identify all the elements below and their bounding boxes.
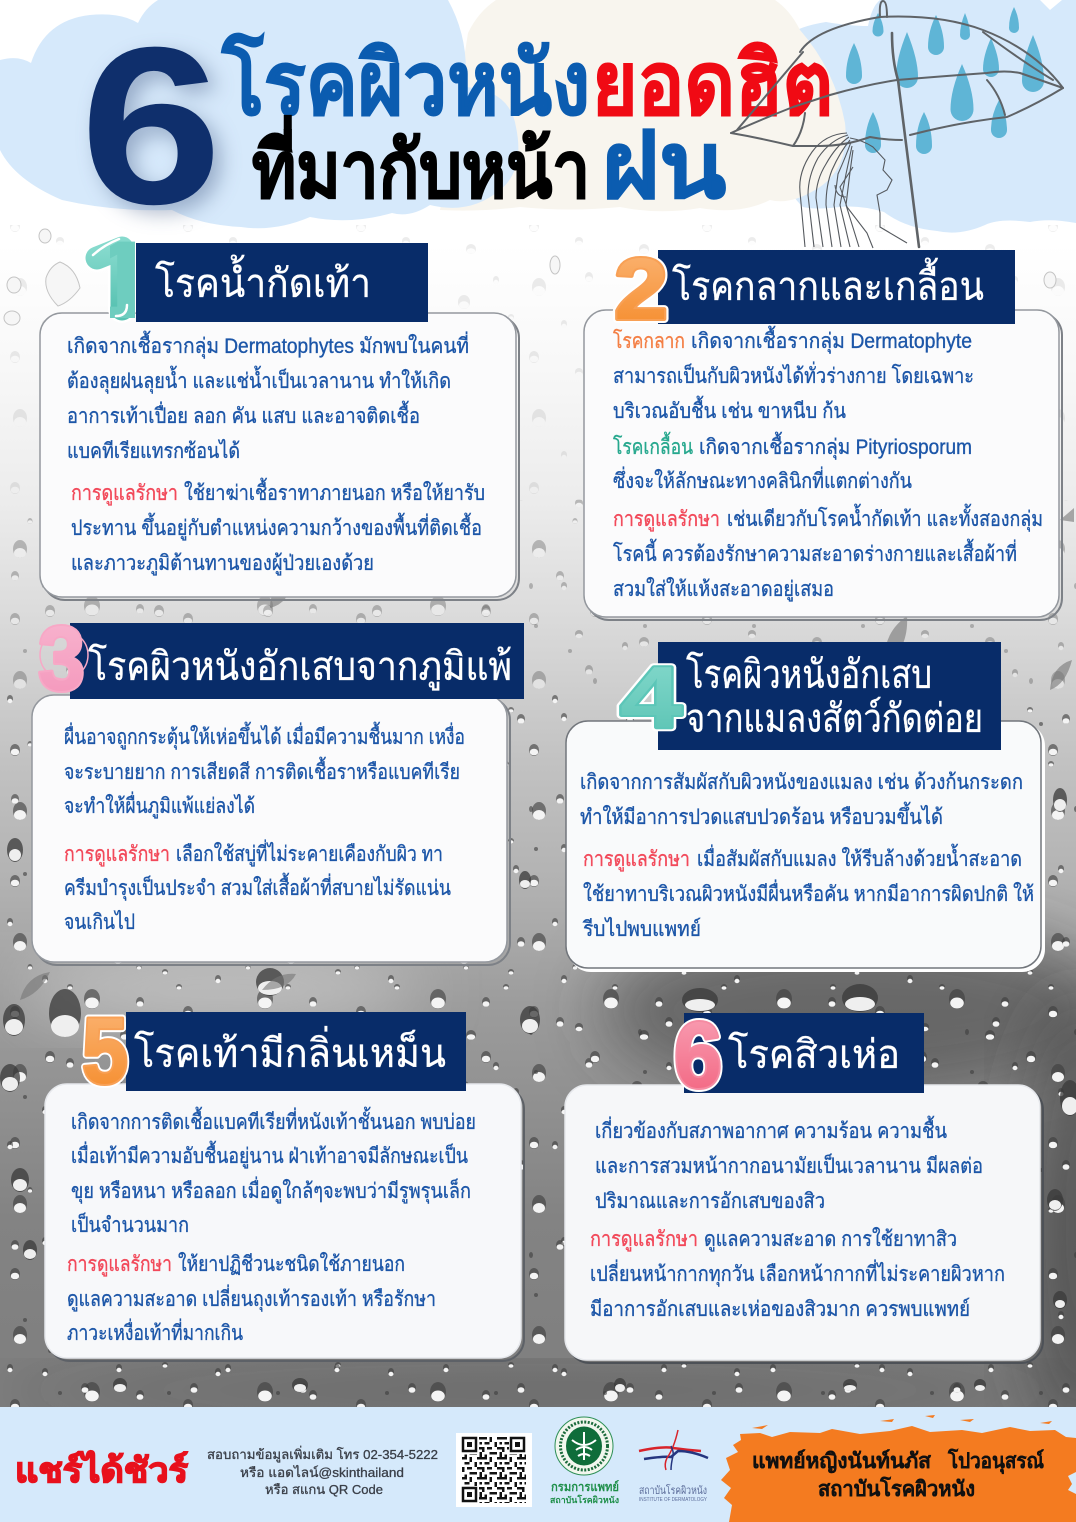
description — [580, 771, 1023, 829]
description: ผื่นอาจถูกกระตุ้นให้เห่อขึ้นได้ เมื่อมีความชื้นมาก เหงื่อ — [64, 722, 465, 750]
heading bar: โรคเท้ามีกลิ่นเหม็น — [134, 1026, 446, 1076]
heading bar: โรคผิวหนังอักเสบ — [686, 652, 932, 697]
heading bar: โรคกลากและเกลื้อน — [672, 257, 984, 309]
card frame — [566, 721, 1044, 971]
treatment — [64, 839, 451, 934]
treatment: เลือกใช้สบู่ที่ไม่ระคายเคืองกับผิว ทา — [176, 839, 443, 867]
treatment: ประทาน ขึ้นอยู่กับตำแหน่งความกว้างของพื้นที่ติดเชื้อ — [71, 513, 482, 541]
headline line 1: ยอดฮิต — [592, 34, 833, 133]
treatment: การดูแลรักษา — [71, 482, 178, 506]
author banner: สถาบันโรคผิวหนัง — [818, 1476, 975, 1501]
description: และการสวมหน้ากากอนามัยเป็นเวลานาน มีผลต่อ — [595, 1152, 983, 1178]
text: tinea versicolor: โรคเกลื้อน — [613, 432, 693, 459]
number 1: 1 — [87, 218, 159, 342]
number 6: 6 — [674, 1003, 722, 1107]
contact text: สอบถามข้อมูลเพิ่มเติม โทร 02-354-5222 — [207, 1446, 438, 1463]
number 4: 4 — [620, 649, 682, 746]
description: แบคทีเรียแทรกซ้อนได้ — [67, 439, 240, 463]
logo: Department of Medical Services: สถาบันโรคผิวหนัง — [550, 1494, 619, 1505]
headline line 1: โรคผิวหนัง — [221, 33, 590, 133]
text: tinea versicolor — [613, 432, 972, 493]
description: ปริมาณและการอักเสบของสิว — [595, 1190, 825, 1213]
treatment: จนเกินไป — [64, 910, 135, 934]
treatment: การดูแลรักษา — [583, 848, 690, 872]
treatment: โรคนี้ ควรต้องรักษาความสะอาดร่างกายและเสื้อผ้าที่ — [613, 539, 1017, 566]
panel 2: โรคกลากและเกลื้อน — [584, 241, 1062, 620]
treatment: การดูแลรักษา — [590, 1228, 698, 1252]
cloud beige — [440, 0, 846, 211]
number 6: 6 — [674, 1003, 722, 1107]
rain drops — [846, 7, 1044, 154]
panel 3: โรคผิวหนังอักเสบจากภูมิแพ้ — [32, 608, 524, 965]
treatment: รีบไปพบแพทย์ — [582, 917, 701, 941]
cloud left — [0, 0, 518, 228]
QR code — [456, 1433, 532, 1507]
card frame — [32, 695, 510, 965]
number 5: 5 — [82, 998, 128, 1103]
big number 6: 6 — [88, 9, 230, 259]
title — [80, 1, 833, 259]
description — [67, 331, 469, 463]
treatment: ครีมบำรุงเป็นประจำ สวมใส่เสื้อผ้าที่สบายไม่รัดแน่น — [64, 873, 451, 901]
author banner — [721, 1415, 1076, 1522]
logo: Institute of Dermatology — [639, 1430, 708, 1503]
heading bar — [684, 1013, 924, 1093]
author banner: แพทย์หญิงนันท์นภัส — [752, 1449, 931, 1474]
number 5: 5 — [82, 998, 128, 1103]
contact text: หรือ สแกน QR Code — [265, 1482, 383, 1497]
brand: share with confidence: แชร์ได้ชัวร์ — [15, 1450, 189, 1490]
treatment: เมื่อสัมผัสกับแมลง ให้รีบล้างด้วยน้ำสะอาด — [697, 844, 1022, 871]
description: เกิดจากการติดเชื้อแบคทีเรียที่หนังเท้าชั้นนอก พบบ่อย — [71, 1107, 476, 1134]
author banner: โปวอนุสรณ์ — [947, 1448, 1044, 1475]
heading bar: โรคสิวเห่อ — [728, 1032, 900, 1077]
text: ringworm — [613, 326, 974, 423]
description: ทำให้มีอาการปวดแสบปวดร้อน หรือบวมขึ้นได้ — [580, 802, 943, 829]
umbrella — [731, 1, 1063, 247]
treatment — [582, 844, 1034, 941]
headline line 2: ฝน — [602, 115, 726, 217]
text: ringworm: สามารถเป็นกับผิวหนังได้ทั่วร่างกาย โดยเฉพาะ — [613, 361, 974, 388]
contact text: หรือ แอดไลน์@skinthailand — [240, 1465, 404, 1480]
treatment: ดูแลความสะอาด การใช้ยาทาสิว — [704, 1227, 957, 1252]
treatment — [71, 478, 485, 576]
description — [71, 1107, 476, 1237]
heading bar — [70, 623, 524, 699]
headline line 2: ที่มากับหน้า — [252, 115, 590, 214]
card frame — [40, 313, 519, 600]
panel 4: โรคผิวหนังอักเสบจากแมลงสัตว์กัดต่อย — [566, 642, 1044, 971]
treatment: ดูแลความสะอาด เปลี่ยนถุงเท้ารองเท้า หรือรักษา — [67, 1284, 436, 1312]
card frame — [584, 310, 1062, 620]
treatment — [67, 1252, 436, 1345]
number 1 — [86, 236, 136, 320]
description: เมื่อเท้ามีความอับชื้นอยู่นาน ฝ่าเท้าอาจมีลักษณะเป็น — [71, 1141, 468, 1169]
description: เกี่ยวข้องกับสภาพอากาศ ความร้อน ความชื้น — [595, 1116, 947, 1143]
treatment: ใช้ยาฆ่าเชื้อราทาภายนอก หรือให้ยารับ — [184, 478, 485, 505]
text: tinea versicolor: เกิดจากเชื้อรากลุ่ม Pityriosporum — [699, 432, 972, 460]
treatment: การดูแลรักษา — [64, 843, 170, 867]
heading bar: โรคน้ำกัดเท้า — [155, 254, 371, 306]
treatment: มีอาการอักเสบและเห่อของสิวมาก ควรพบแพทย์ — [590, 1297, 970, 1321]
headline line 1 — [221, 33, 833, 133]
treatment: สวมใส่ให้แห้งสะอาดอยู่เสมอ — [613, 577, 834, 602]
heading bar — [658, 250, 1015, 324]
treatment: และภาวะภูมิต้านทานของผู้ป่วยเองด้วย — [71, 552, 374, 576]
description: ขุย หรือหนา หรือลอก เมื่อดูใกล้ๆจะพบว่ามีรูพรุนเล็ก — [71, 1176, 471, 1204]
number 3: 3 — [38, 608, 85, 710]
heading bar — [126, 1012, 466, 1091]
description: เกิดจากเชื้อรากลุ่ม Dermatophytes มักพบในคนที่ — [67, 331, 469, 359]
treatment: การดูแลรักษา — [67, 1253, 172, 1277]
clouds — [0, 0, 1076, 233]
card frame — [565, 1085, 1043, 1363]
treatment — [590, 1227, 1005, 1321]
girl line art — [800, 133, 907, 248]
footer — [0, 1407, 1076, 1522]
logo: Department of Medical Services: กรมการแพทย์ — [551, 1480, 619, 1494]
contact text — [207, 1446, 438, 1497]
treatment — [613, 504, 1043, 602]
logo: Department of Medical Services — [550, 1417, 619, 1505]
number 2: 2 — [614, 241, 668, 338]
description — [64, 722, 465, 819]
number 2: 2 — [614, 241, 668, 338]
description: เกิดจากการสัมผัสกับผิวหนังของแมลง เช่น ด้วงก้นกระดก — [580, 771, 1023, 794]
text: tinea versicolor: ซึ่งจะให้ลักษณะทางคลินิกที่แตกต่างกัน — [613, 466, 912, 493]
panel 5: โรคเท้ามีกลิ่นเหม็น — [45, 998, 524, 1361]
number 4: 4 — [620, 649, 682, 746]
text: ringworm: บริเวณอับชื้น เช่น ขาหนีบ ก้น — [613, 396, 846, 423]
description: จะทำให้ผื่นภูมิแพ้แย่ลงได้ — [64, 791, 255, 819]
card frame — [45, 1084, 524, 1361]
heading bar — [136, 243, 428, 322]
panel 1: โรคน้ำกัดเท้า — [40, 218, 519, 600]
description: จะระบายยาก การเสียดสี การติดเชื้อราหรือแบคทีเรีย — [64, 757, 460, 784]
description: ต้องลุยฝนลุยน้ำ และแช่น้ำเป็นเวลานาน ทำให้เกิด — [67, 366, 451, 394]
text: ringworm: โรคกลาก — [613, 329, 685, 353]
description: เป็นจำนวนมาก — [71, 1211, 189, 1237]
heading bar — [658, 642, 1001, 750]
heading bar: จากแมลงสัตว์กัดต่อย — [686, 696, 983, 741]
text: ringworm: เกิดจากเชื้อรากลุ่ม Dermatophyte — [691, 326, 972, 354]
description — [595, 1116, 983, 1213]
treatment: ภาวะเหงื่อเท้าที่มากเกิน — [67, 1318, 243, 1345]
big number 6: 6 — [80, 1, 222, 251]
treatment: ให้ยาปฏิชีวนะชนิดใช้ภายนอก — [178, 1252, 405, 1276]
cloud right — [786, 0, 1076, 233]
heading bar: โรคผิวหนังอักเสบจากภูมิแพ้ — [88, 644, 512, 690]
illustration: girl under umbrella in rain — [731, 1, 1063, 248]
logo: Institute of Dermatology: INSTITUTE OF DERMATOLOGY — [639, 1497, 708, 1503]
logo: Institute of Dermatology: สถาบันโรคผิวหนัง — [639, 1483, 707, 1497]
treatment: การดูแลรักษา — [613, 508, 720, 532]
panel 6: โรคสิวเห่อ — [565, 1003, 1043, 1363]
treatment: เปลี่ยนหน้ากากทุกวัน เลือกหน้ากากที่ไม่ระคายผิวหาก — [590, 1259, 1005, 1287]
description: อาการเท้าเปื่อย ลอก คัน แสบ และอาจติดเชื้อ — [67, 401, 420, 428]
